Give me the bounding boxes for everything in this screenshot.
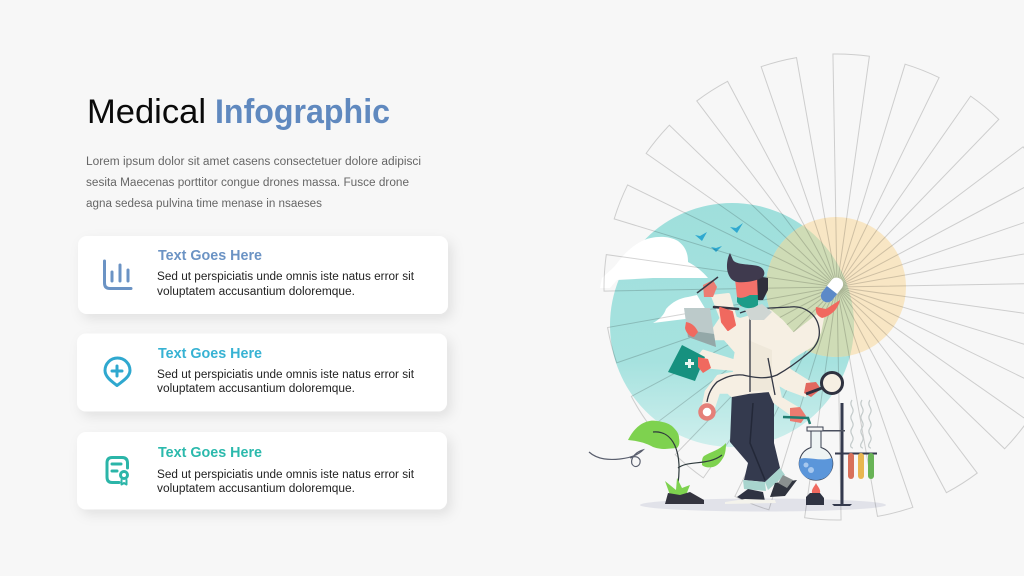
left shoe xyxy=(737,489,765,501)
card 3 heading: Text Goes Here xyxy=(158,445,262,461)
hand raised with pen xyxy=(703,280,717,297)
card 3 body: Sed ut perspiciatis unde omnis iste natus error sit xyxy=(157,469,415,481)
clipboard xyxy=(684,308,716,347)
kit cross xyxy=(685,359,694,368)
trousers xyxy=(730,392,780,482)
card 3 body: voluptatem accusantium doloremque. xyxy=(157,483,355,495)
ring held xyxy=(700,406,714,418)
right cuff xyxy=(765,468,785,490)
right shoe xyxy=(770,480,797,497)
hand on clipboard xyxy=(685,322,698,337)
card 1 heading: Text Goes Here xyxy=(158,248,262,264)
burner xyxy=(806,483,824,505)
raised pen xyxy=(697,277,718,293)
held test tube xyxy=(783,417,810,424)
orange sun circle xyxy=(766,217,906,357)
mask xyxy=(737,295,758,308)
card 1 body: Sed ut perspiciatis unde omnis iste natus error sit xyxy=(157,271,415,283)
centre pen xyxy=(714,307,738,309)
left cuff xyxy=(743,480,766,491)
collar xyxy=(745,304,772,320)
pill xyxy=(818,275,846,305)
card 2 heading: Text Goes Here xyxy=(158,346,262,362)
test tubes xyxy=(848,453,874,479)
hand with tube xyxy=(790,407,806,423)
card 2 body: voluptatem accusantium doloremque. xyxy=(157,383,355,395)
icon: location pin with plus xyxy=(105,358,130,386)
circle overlap xyxy=(766,226,854,357)
trouser crease xyxy=(750,403,765,480)
card 1 body xyxy=(157,271,415,298)
side hair xyxy=(757,276,768,300)
plant xyxy=(628,421,726,504)
magnifier handle xyxy=(806,388,822,394)
vapour lines xyxy=(851,400,871,448)
card 2 body: Sed ut perspiciatis unde omnis iste natus error sit xyxy=(157,369,415,381)
intro text block: sesita Maecenas porttitor congue drones massa. Fusce drone xyxy=(86,177,409,189)
teal background circle xyxy=(610,203,854,447)
magnifier hand xyxy=(804,382,821,397)
squiggle line xyxy=(589,450,643,467)
hand holding pill xyxy=(816,300,840,318)
first aid kit xyxy=(668,345,705,381)
icon: bar chart xyxy=(104,261,131,288)
birds xyxy=(695,223,743,252)
flask xyxy=(799,427,833,480)
title: Medical xyxy=(87,93,206,131)
panel: card 2 xyxy=(77,334,447,412)
magnifier xyxy=(822,372,842,394)
clipboard lower xyxy=(687,330,716,347)
title xyxy=(87,93,390,131)
intro text block: agna sedesa pulvina time menase in nsaeses xyxy=(86,198,322,210)
card 1 body: voluptatem accusantium doloremque. xyxy=(157,286,355,298)
title: Infographic xyxy=(215,93,390,131)
coat with arms xyxy=(698,295,823,415)
hand on kit xyxy=(698,357,711,373)
intro text block xyxy=(86,156,421,210)
intro text block: Lorem ipsum dolor sit amet casens consectetuer dolore adipisci xyxy=(86,156,421,168)
card 3 body xyxy=(157,469,415,495)
hair xyxy=(727,253,764,282)
face xyxy=(735,277,758,308)
clouds xyxy=(600,237,708,323)
stethoscope xyxy=(707,307,819,402)
radial fan of outlined wedges xyxy=(603,53,1024,521)
icon: certificate xyxy=(107,458,128,484)
right shoe patch xyxy=(778,475,793,488)
coat inner panel xyxy=(748,340,772,391)
doctor character xyxy=(668,253,846,504)
card 2 body xyxy=(157,369,415,395)
left sole xyxy=(725,499,776,504)
panel: card 3 xyxy=(77,432,447,510)
panel: card 1 xyxy=(78,236,448,314)
centre hand xyxy=(720,308,735,330)
retort stand xyxy=(823,403,877,506)
ground shadow xyxy=(640,498,886,512)
